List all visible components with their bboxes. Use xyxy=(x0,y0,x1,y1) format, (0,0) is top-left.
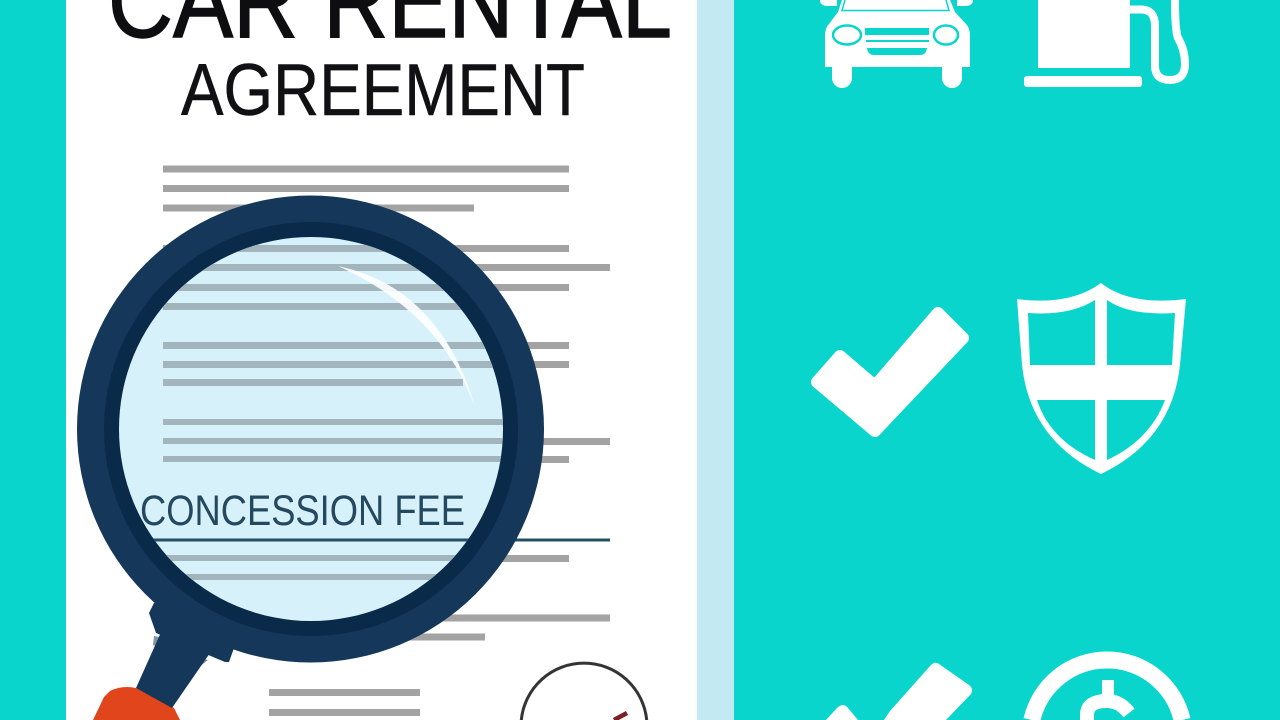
magnifier inner ring xyxy=(104,222,518,636)
icon: shield xyxy=(1017,283,1186,474)
magnifier collar xyxy=(149,600,234,662)
subtitle: agreement: AGREEMENT xyxy=(181,50,585,131)
icon: check mark 2 xyxy=(826,663,972,720)
magnified label: concession fee: CONCESSION FEE xyxy=(140,487,465,535)
handle shadows xyxy=(153,636,208,668)
magnifier handle xyxy=(136,630,212,708)
signature underline xyxy=(163,538,610,542)
signature stamp circle xyxy=(521,663,647,720)
icon: fuel pump xyxy=(1024,0,1185,87)
magnified lines xyxy=(154,245,503,580)
lens highlight xyxy=(338,266,475,407)
document side edge xyxy=(697,0,734,720)
panel: rental agreement document xyxy=(66,0,734,720)
icon: check mark xyxy=(817,313,963,431)
magnifier grip xyxy=(93,687,180,720)
icon: dollar coin xyxy=(1032,660,1182,720)
magnifier glass xyxy=(119,237,503,621)
icon: magnifying glass xyxy=(77,196,544,720)
icon: car front xyxy=(820,0,973,88)
magnifier outer ring xyxy=(77,196,544,662)
document text lines xyxy=(163,166,610,716)
document paper xyxy=(66,0,697,720)
